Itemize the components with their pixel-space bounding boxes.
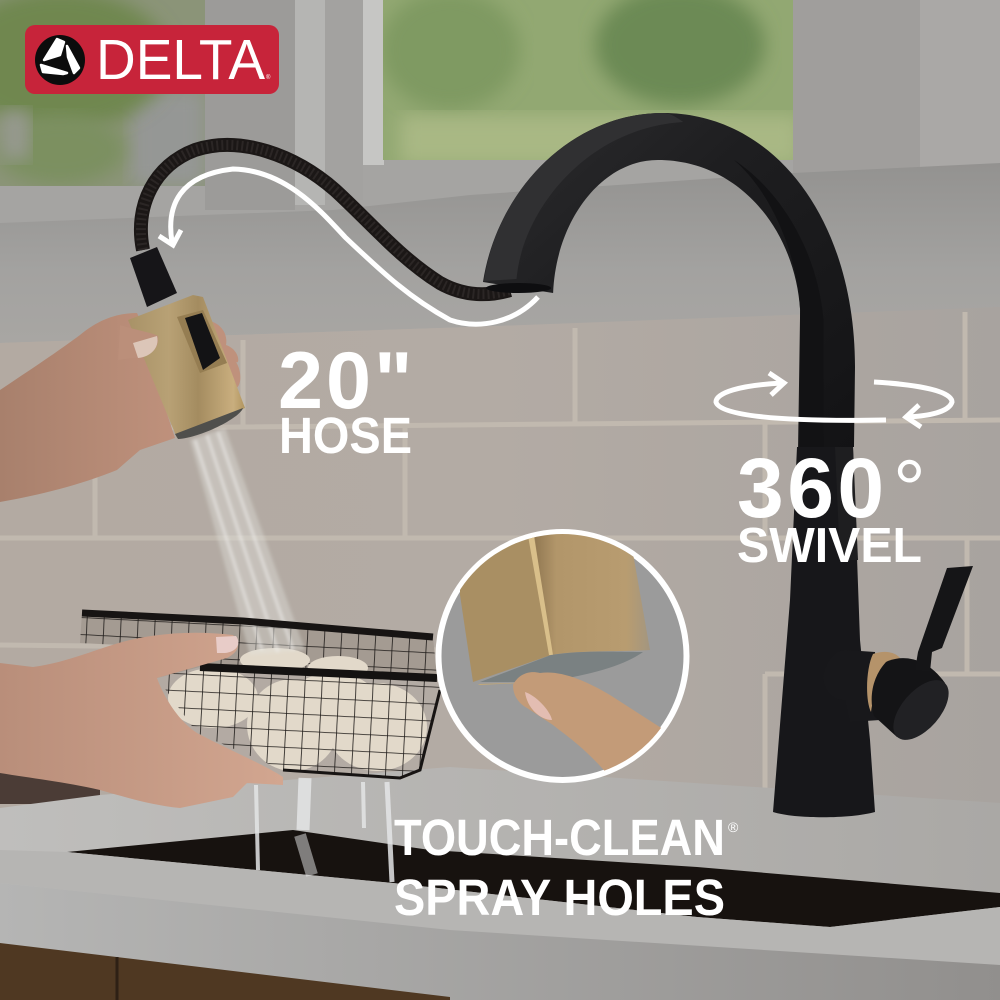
label: 360 swivel: 360 (737, 441, 888, 535)
arrows: 360 swivel (716, 373, 952, 427)
faucet handle (823, 566, 973, 750)
label: touch-clean spray holes: SPRAY HOLES (394, 869, 725, 926)
spray head (128, 247, 245, 439)
counter (0, 767, 1000, 1000)
pull-down hose (141, 145, 510, 294)
label: 360 swivel: ° (893, 444, 926, 535)
dark backsplash gap (0, 768, 100, 804)
faucet spout gooseneck (483, 113, 855, 447)
subway tiles (0, 307, 1000, 810)
logo: Delta: ® (266, 74, 271, 81)
window sill (0, 163, 1000, 343)
thumb over spray head (118, 325, 158, 360)
logo: Delta (25, 25, 279, 94)
basket hand nail (216, 636, 238, 653)
wooden cabinet (0, 943, 450, 1000)
label: touch-clean spray holes (394, 809, 739, 926)
label: 20 inch hose: 20" (278, 336, 416, 426)
wire basket back panel (80, 613, 437, 678)
window frame and views (0, 0, 1000, 225)
logo: Delta: DELTA (96, 28, 265, 92)
arrow: hose reach (159, 169, 538, 324)
label: 360 swivel (737, 441, 926, 573)
hand holding spray head (0, 313, 175, 502)
label: 360 swivel: SWIVEL (737, 519, 922, 573)
water drips (256, 778, 392, 882)
faucet base body (773, 447, 875, 817)
inset circle: touch-clean spray holes (436, 525, 690, 790)
mushrooms (168, 648, 427, 771)
upper hand fingers behind spray head (205, 320, 240, 389)
label: touch-clean spray holes: TOUCH-CLEAN (394, 809, 725, 866)
water spray (190, 428, 305, 655)
wire basket front panel (82, 613, 440, 778)
label: 20 inch hose: HOSE (279, 407, 412, 464)
label: touch-clean spray holes: ® (728, 819, 739, 835)
hand holding basket (0, 633, 283, 808)
